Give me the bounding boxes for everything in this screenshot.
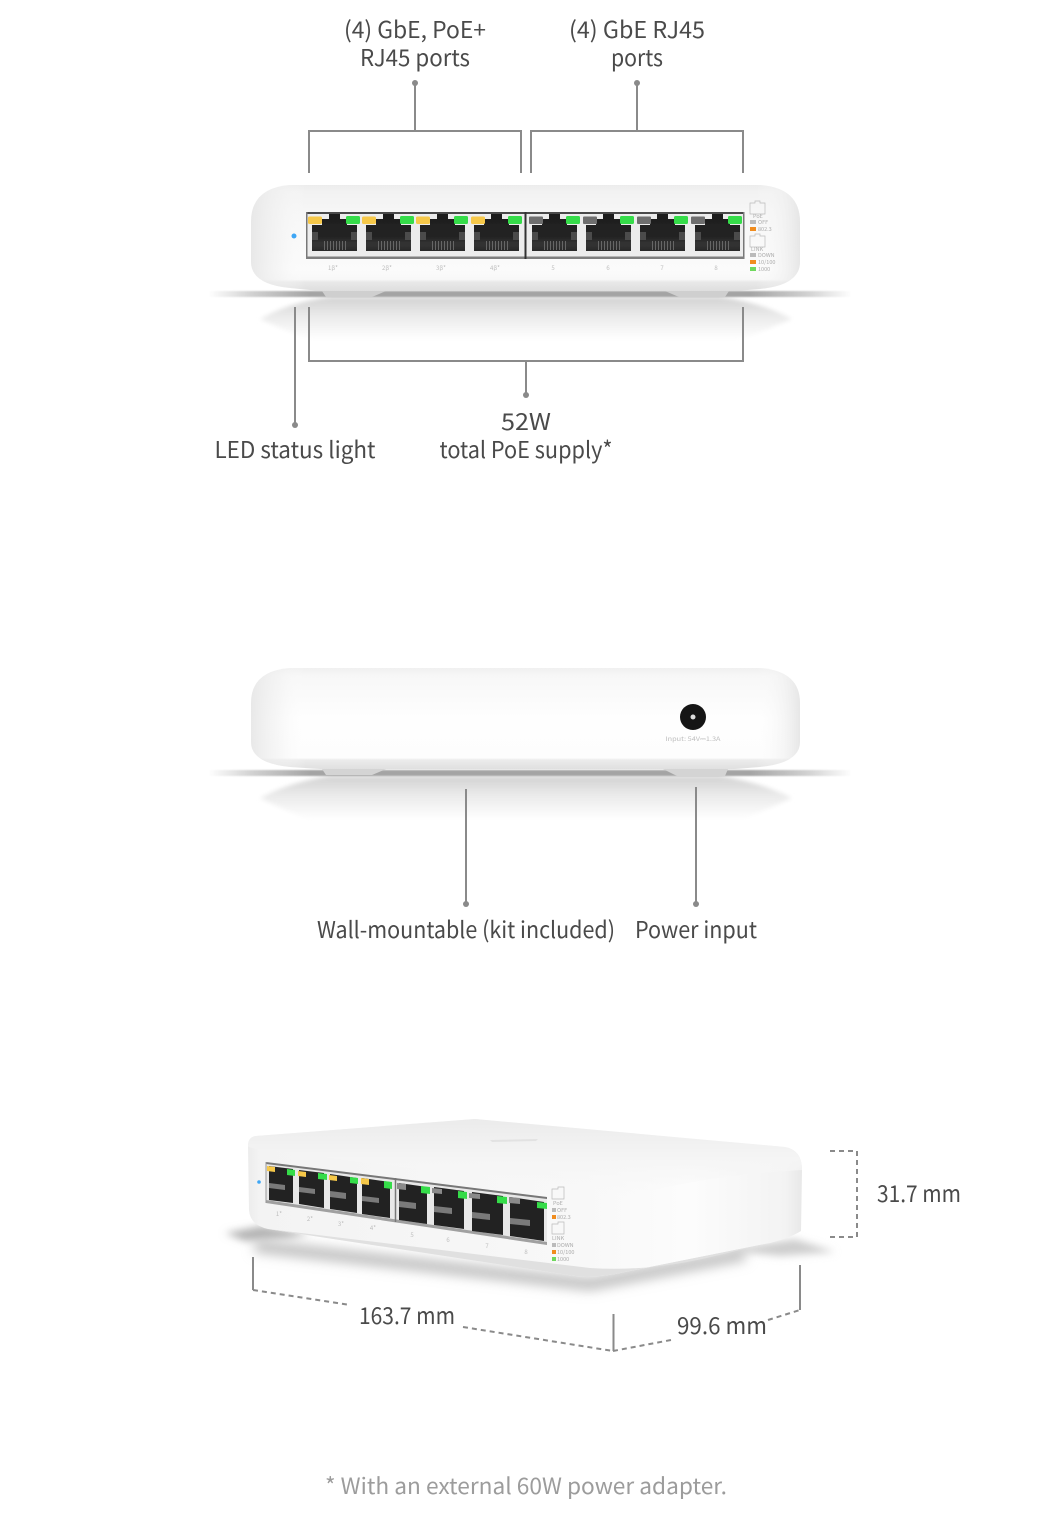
LED legend: OFF: [557, 1206, 567, 1214]
panel: switch front view: [208, 185, 852, 340]
body side shading: [251, 668, 800, 769]
LED legend: 802.3: [758, 225, 772, 233]
dimension: width: [253, 1257, 614, 1351]
port LEDs: [267, 1166, 547, 1209]
port assembly: [266, 1162, 547, 1245]
LED legend: DOWN: [758, 251, 775, 259]
port assembly: [306, 212, 744, 259]
dimension: depth: 99.6 mm: [677, 1307, 767, 1341]
port numbers: 1*: [276, 1209, 282, 1218]
port numbers: 1β*: [328, 263, 338, 272]
label: total PoE supply: [440, 403, 612, 465]
LED legend: [552, 1187, 574, 1263]
callout: PoE+ ports label: (4) GbE, PoE+: [344, 11, 486, 45]
front shadow under body: [255, 1246, 745, 1284]
callout: RJ45 ports label: ports: [611, 39, 663, 73]
callout: PoE+ ports label: [344, 11, 486, 73]
port numbers: 5: [551, 263, 555, 272]
port divider: [394, 1178, 396, 1222]
port numbers: 3*: [338, 1219, 344, 1228]
reflection: [260, 297, 792, 340]
dimension: height: 31.7 mm: [877, 1175, 961, 1209]
port numbers: 2β*: [382, 263, 392, 272]
leader: LED status light: [292, 307, 298, 428]
reflection: [260, 776, 792, 820]
rubber feet: [322, 291, 729, 297]
port numbers: 8: [714, 263, 718, 272]
port numbers: 4*: [370, 1223, 376, 1232]
bracket: total PoE supply: [309, 307, 743, 398]
port contacts: [269, 1183, 530, 1226]
LED legend: LINK: [751, 245, 764, 253]
left contact shadow: [225, 1226, 310, 1241]
callout: PoE+ ports label: RJ45 ports: [360, 39, 470, 73]
LED legend: LINK: [552, 1234, 565, 1242]
rubber feet: [322, 769, 728, 776]
LED legend: DOWN: [557, 1241, 574, 1249]
switch body: [248, 1119, 802, 1276]
panel: switch rear view: [208, 668, 852, 820]
port numbers: [328, 263, 718, 272]
port numbers: 7: [485, 1241, 489, 1250]
top surface: [248, 1119, 802, 1198]
port numbers: 6: [606, 263, 610, 272]
LED legend: OFF: [758, 218, 768, 226]
dimension: height: [830, 1151, 961, 1237]
ports 1-8: [312, 214, 740, 251]
switch body: [251, 668, 800, 769]
dimension: width: 163.7 mm: [359, 1297, 455, 1331]
floor shadow: [208, 770, 852, 776]
LED status dot: [292, 234, 296, 238]
leader: power input: [693, 787, 699, 907]
port numbers: 6: [446, 1235, 450, 1244]
bottom lip: [268, 1229, 770, 1276]
port numbers: 3β*: [436, 263, 446, 272]
callout: RJ45 ports label: [569, 11, 705, 73]
port frame: [306, 212, 744, 259]
bracket: PoE+ ports: [309, 80, 521, 173]
LED legend: PoE: [753, 212, 763, 220]
switch body: [251, 185, 800, 291]
panel: switch angled view: [225, 1119, 835, 1284]
port numbers: 8: [524, 1247, 528, 1256]
label: LED status light: LED status light: [214, 431, 376, 465]
port frame: [266, 1162, 547, 1245]
label: total PoE supply: total PoE supply*: [440, 431, 612, 465]
ports 1-8: [269, 1166, 544, 1241]
power rating text: Input: 54V⎓1.3A: [666, 734, 721, 743]
label: wall-mountable: Wall-mountable (kit included): [317, 911, 615, 945]
LED legend: PoE: [553, 1199, 563, 1207]
label: power input: Power input: [635, 911, 757, 945]
bracket: RJ45 ports: [531, 80, 743, 173]
port numbers: 4β*: [490, 263, 500, 272]
LED legend: 1000: [758, 265, 770, 273]
icon: power jack: [680, 704, 706, 730]
port numbers: 5: [410, 1230, 414, 1239]
right contact shadow: [725, 1239, 835, 1256]
LED legend: 10/100: [557, 1248, 574, 1256]
body side shading: [251, 185, 800, 291]
port LEDs: [308, 216, 742, 224]
port numbers: 7: [660, 263, 664, 272]
label: total PoE supply: 52W: [501, 403, 551, 437]
LED legend: 802.3: [557, 1213, 571, 1221]
floor shadow: [208, 291, 852, 297]
logo mark: [490, 1139, 538, 1142]
port numbers: 2*: [307, 1214, 313, 1223]
port numbers: [276, 1209, 528, 1256]
LED status dot: [257, 1180, 261, 1184]
LED legend: 10/100: [758, 258, 775, 266]
LED legend: 1000: [557, 1255, 569, 1263]
callout: RJ45 ports label: (4) GbE RJ45: [569, 11, 705, 45]
LED legend: [750, 201, 775, 273]
dimension: depth: [613, 1265, 800, 1351]
footnote: * With an external 60W power adapter.: [325, 1469, 727, 1501]
leader: wall-mountable: [463, 789, 469, 907]
